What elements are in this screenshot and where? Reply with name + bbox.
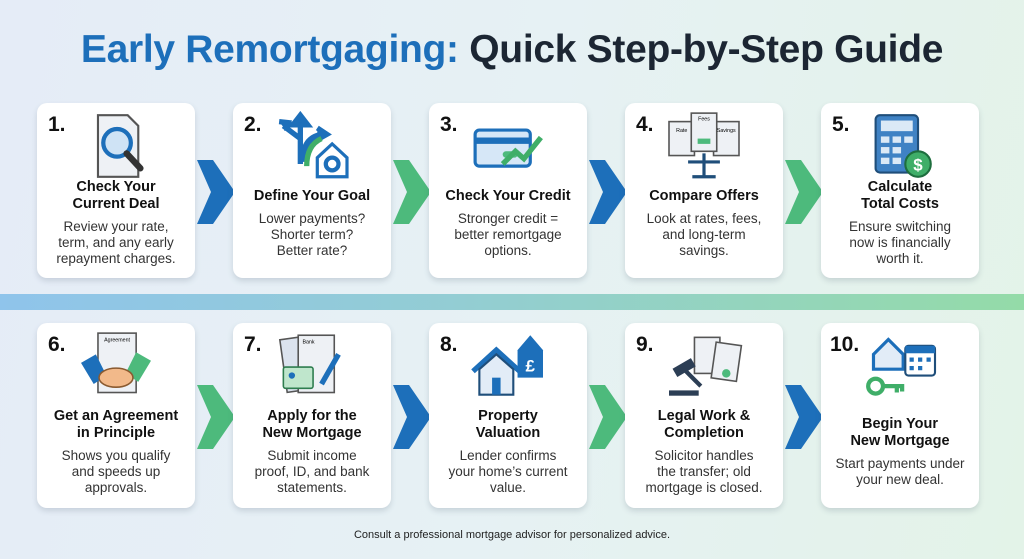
card 7: Submit income: [267, 448, 357, 463]
card 10: Begin Your: [862, 416, 938, 432]
card 8: [429, 323, 587, 508]
card 9: [625, 323, 783, 508]
arrow 6: [197, 385, 233, 449]
card 2: [233, 103, 391, 278]
arrow 2: [393, 160, 429, 224]
card 6: 6.: [48, 333, 66, 356]
card 6: approvals.: [85, 480, 147, 495]
icon: application documents: Bank: [302, 340, 315, 346]
card 2: Shorter term?: [271, 226, 353, 242]
card 8: value.: [490, 480, 526, 495]
card 5: Total Costs: [861, 196, 939, 212]
card 2: Lower payments?: [259, 210, 365, 226]
card 9: 9.: [636, 333, 654, 356]
card 1: 1.: [48, 113, 66, 136]
card 1: Check Your: [76, 179, 156, 195]
arrow 3: [589, 160, 625, 224]
icon: offers scale: Savings: [717, 128, 736, 134]
card 10: [821, 323, 979, 508]
card 5: Calculate: [868, 179, 932, 195]
icon: house with pound tag: [471, 335, 544, 396]
card 5: [821, 103, 979, 278]
card 1: Review your rate,: [63, 219, 169, 234]
card 2: Better rate?: [277, 242, 347, 258]
card 9: Solicitor handles: [654, 448, 754, 463]
card 6: Get an Agreement: [54, 408, 178, 424]
card 7: [233, 323, 391, 508]
card 2: Define Your Goal: [254, 188, 370, 204]
icon: application documents: [278, 334, 341, 394]
card 7: proof, ID, and bank: [255, 464, 369, 479]
card 5: 5.: [832, 113, 850, 136]
arrow 7: [393, 385, 429, 449]
icon: agreement handshake: [81, 332, 151, 394]
card 7: 7.: [244, 333, 262, 356]
card 8: your home’s current: [448, 464, 568, 479]
card 10: your new deal.: [856, 472, 944, 487]
icon: calculator: $: [913, 155, 923, 174]
card 1: [37, 103, 195, 278]
card 2: 2.: [244, 113, 262, 136]
card 7: Apply for the: [267, 408, 357, 424]
title: Early Remortgaging: Quick Step-by-Step Guide: [81, 28, 943, 71]
card 3: Check Your Credit: [445, 188, 571, 204]
icon: magnifier document: [96, 114, 144, 178]
card 4: 4.: [636, 113, 654, 136]
icon: credit card check: [474, 128, 543, 168]
icon: offers scale: [668, 112, 740, 178]
arrow 9: [785, 385, 821, 449]
arrow 1: [197, 160, 233, 224]
icon: direction arrows house: [278, 111, 349, 178]
card 4: savings.: [679, 242, 729, 258]
card 10: New Mortgage: [850, 433, 950, 449]
card 5: Ensure switching: [849, 219, 951, 234]
card 3: 3.: [440, 113, 458, 136]
card 6: and speeds up: [72, 464, 160, 479]
card 9: mortgage is closed.: [645, 480, 763, 495]
icon: agreement handshake: Agreement: [104, 338, 131, 344]
card 6: in Principle: [77, 425, 155, 441]
card 9: Completion: [664, 425, 744, 441]
card 8: Lender confirms: [460, 448, 556, 463]
icon: house key calendar: [866, 337, 936, 396]
card 4: Look at rates, fees,: [647, 210, 761, 226]
card 9: Legal Work &: [658, 408, 750, 424]
card 4: and long-term: [662, 226, 746, 242]
card 3: [429, 103, 587, 278]
card 8: 8.: [440, 333, 458, 356]
arrow 8: [589, 385, 625, 449]
card 4: [625, 103, 783, 278]
icon: offers scale: Rate: [676, 128, 687, 134]
card 6: [37, 323, 195, 508]
card 1: repayment charges.: [56, 251, 176, 266]
card 10: Start payments under: [835, 456, 965, 471]
card 3: better remortgage: [454, 226, 562, 242]
icon: offers scale: Fees: [698, 117, 710, 123]
card 10: 10.: [830, 333, 859, 356]
icon: gavel documents: [669, 336, 742, 396]
card 1: Current Deal: [72, 196, 160, 212]
card 5: now is financially: [849, 235, 951, 250]
card 4: Compare Offers: [649, 188, 759, 204]
icon: calculator: [874, 114, 932, 178]
arrow 4: [785, 160, 821, 224]
card 7: New Mortgage: [262, 425, 362, 441]
card 3: options.: [484, 242, 532, 258]
card 3: Stronger credit =: [458, 210, 558, 226]
icon: house with pound tag: £: [526, 356, 536, 375]
card 6: Shows you qualify: [62, 448, 170, 463]
card 1: term, and any early: [58, 235, 174, 250]
card 8: Property: [478, 408, 538, 424]
card 5: worth it.: [876, 251, 924, 266]
card 7: statements.: [277, 480, 347, 495]
card 8: Valuation: [476, 425, 540, 441]
card 9: the transfer; old: [657, 464, 751, 479]
footer note: Consult a professional mortgage advisor for personalized advice.: [354, 529, 670, 541]
